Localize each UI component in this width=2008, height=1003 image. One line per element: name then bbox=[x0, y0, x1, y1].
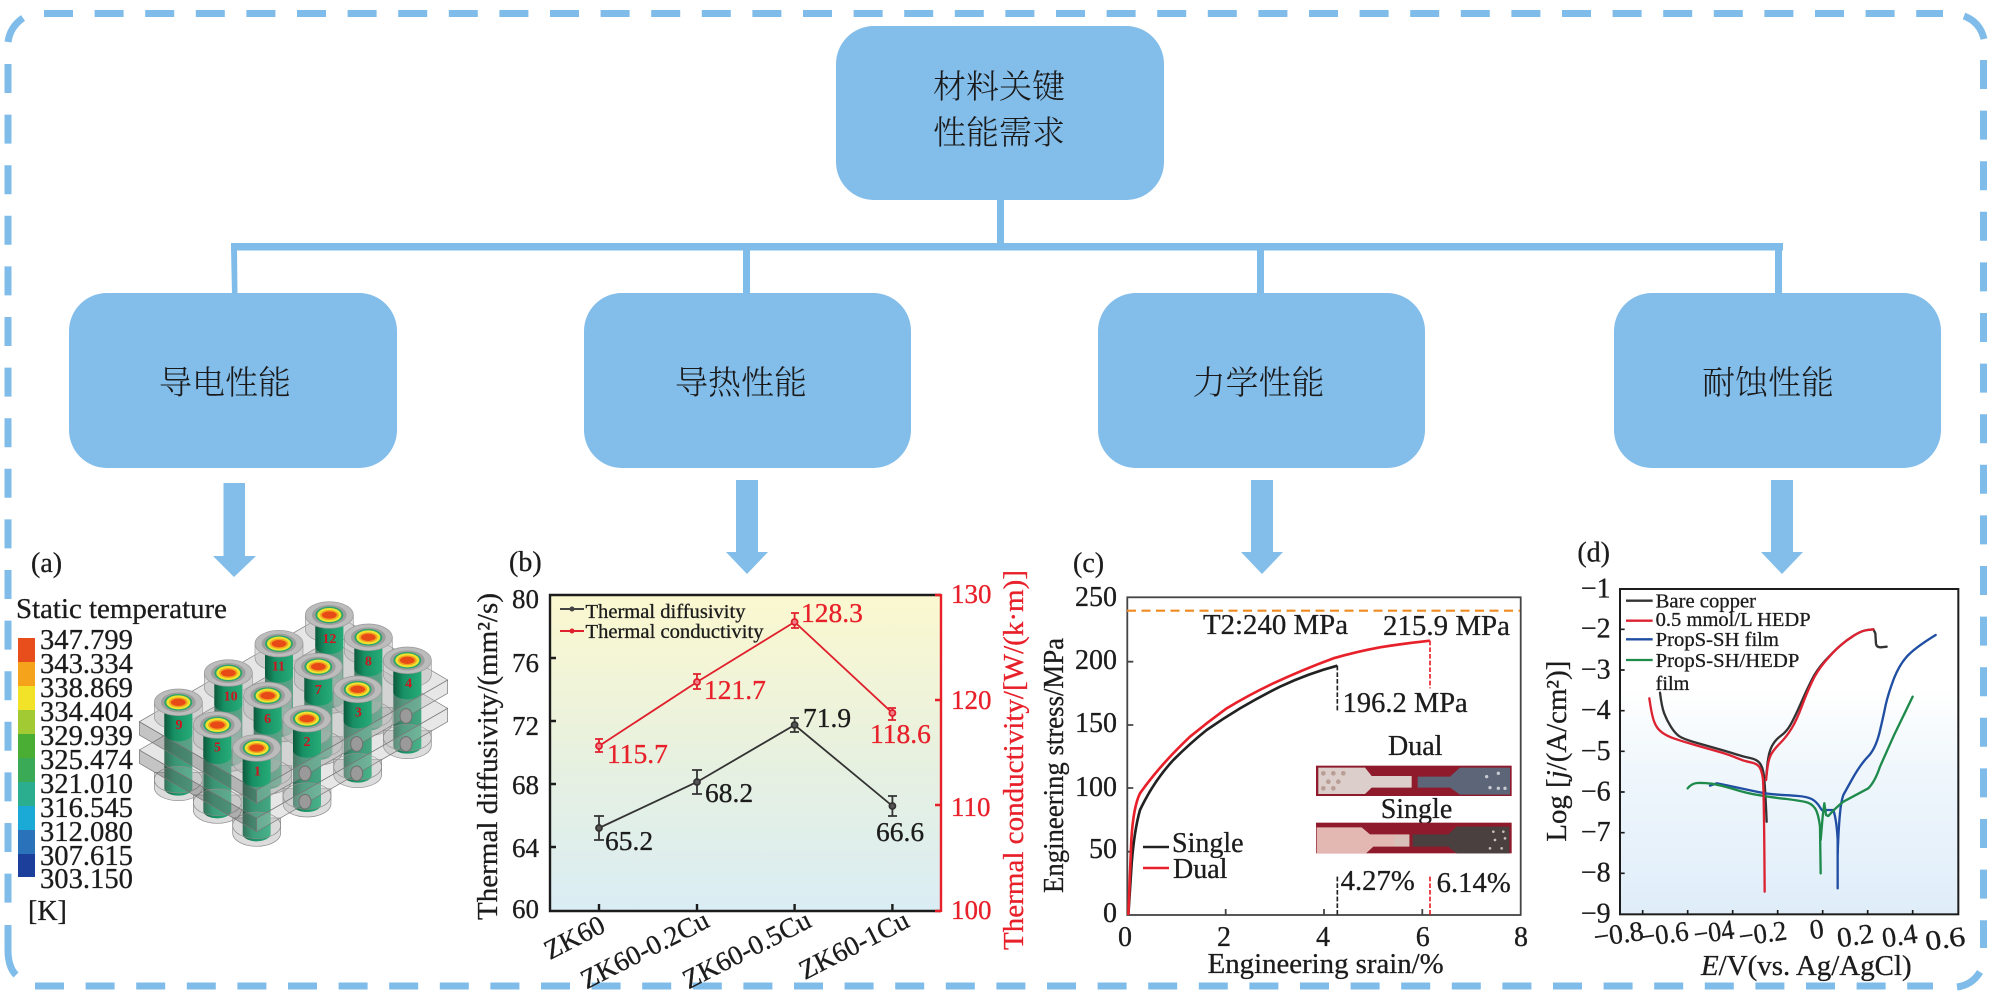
legend: Thermal conductivity bbox=[586, 621, 764, 643]
colorbar values: 347.799 bbox=[40, 625, 133, 656]
y axis labels bbox=[1581, 573, 1611, 929]
legend bbox=[560, 601, 764, 643]
top box: key material property requirements: 性能需求 bbox=[933, 107, 1065, 154]
y axis labels: −7 bbox=[1581, 817, 1611, 848]
3D cylinder array: 6 bbox=[264, 712, 271, 727]
box: mechanical properties bbox=[1098, 293, 1425, 468]
box: thermal conductivity bbox=[584, 293, 911, 468]
x axis labels: −0.2 bbox=[1737, 916, 1789, 953]
x axis labels: 0.2 bbox=[1835, 918, 1876, 954]
3D cylinder array bbox=[139, 602, 448, 846]
annotations: 6.14% bbox=[1437, 868, 1511, 899]
y axis labels: −8 bbox=[1581, 858, 1611, 889]
x axis labels: −04 bbox=[1692, 915, 1736, 951]
y axis labels: −2 bbox=[1581, 613, 1611, 644]
x axis labels: −0.6 bbox=[1638, 916, 1691, 954]
stress-strain curves bbox=[1128, 641, 1430, 915]
polarization curves bbox=[1649, 629, 1936, 892]
value labels: 71.9 bbox=[803, 702, 851, 733]
value labels: 128.3 bbox=[801, 597, 863, 628]
3D cylinder array: 2 bbox=[303, 735, 310, 750]
y axis labels: −4 bbox=[1581, 695, 1611, 726]
x axis labels: 0.4 bbox=[1880, 919, 1919, 954]
right axis title: Thermal conductivity/[W/(k·m)] bbox=[998, 570, 1030, 950]
colorbar values: 329.939 bbox=[40, 721, 133, 752]
3D cylinder array: 9 bbox=[175, 718, 182, 733]
box: thermal conductivity: 导热性能 bbox=[675, 357, 807, 404]
x axis labels: −0.8 bbox=[1592, 916, 1645, 954]
category labels: ZK60 bbox=[538, 909, 610, 965]
axis titles bbox=[1039, 638, 1444, 980]
left axis labels: 80 bbox=[512, 584, 539, 614]
value labels: 118.6 bbox=[870, 718, 931, 749]
right axis labels: 100 bbox=[951, 895, 992, 925]
conductivity series bbox=[595, 613, 896, 752]
box: corrosion resistance bbox=[1614, 293, 1941, 468]
inset photos of tensile specimens bbox=[1316, 766, 1512, 853]
x axis labels: 4 bbox=[1316, 922, 1330, 953]
left axis labels: 60 bbox=[512, 894, 539, 924]
x axis labels bbox=[1118, 922, 1528, 953]
T2 reference dashed line bbox=[1127, 610, 1520, 612]
colorbar values: 325.474 bbox=[40, 745, 133, 776]
y axis labels: −6 bbox=[1581, 777, 1611, 808]
colorbar values: 343.334 bbox=[40, 649, 133, 680]
left axis title: Thermal diffusivity/(mm²/s) bbox=[472, 593, 504, 920]
annotations: T2:240 MPa bbox=[1203, 610, 1349, 641]
y axis labels: −9 bbox=[1581, 898, 1611, 929]
panel label c: (c) bbox=[1073, 548, 1104, 579]
colorbar values: 321.010 bbox=[40, 769, 133, 800]
panel a: static temperature simulation bbox=[16, 548, 448, 927]
legend: PropS-SH/HEDP bbox=[1656, 650, 1799, 672]
legend: film bbox=[1656, 673, 1690, 695]
value labels bbox=[605, 597, 931, 856]
colorbar values: 307.615 bbox=[40, 841, 133, 872]
left axis labels: 68 bbox=[512, 770, 539, 800]
arrow: to panel d bbox=[1761, 480, 1803, 574]
legend bbox=[1143, 828, 1244, 885]
y axis labels: 200 bbox=[1075, 645, 1117, 676]
y axis labels: 50 bbox=[1089, 834, 1117, 865]
x axis labels: 2 bbox=[1217, 922, 1231, 953]
x axis labels: 8 bbox=[1514, 922, 1528, 953]
3D cylinder array: 4 bbox=[405, 677, 412, 692]
legend: Bare copper bbox=[1656, 590, 1756, 612]
colorbar title: Static temperature bbox=[16, 594, 227, 625]
left axis labels: 72 bbox=[512, 711, 539, 741]
plot background and frame bbox=[1620, 589, 1958, 914]
legend: Single bbox=[1172, 828, 1244, 859]
ticks bbox=[1620, 629, 1913, 914]
value labels: 65.2 bbox=[605, 825, 653, 856]
annotations: Single bbox=[1381, 794, 1452, 825]
y axis title: Log [j/(A/cm²)] bbox=[1541, 661, 1573, 842]
diffusivity series bbox=[594, 718, 897, 840]
panel c: stress-strain chart bbox=[1039, 548, 1528, 980]
arrow: to panel a bbox=[213, 483, 256, 577]
y axis labels: −5 bbox=[1581, 736, 1611, 767]
value labels: 68.2 bbox=[705, 777, 753, 808]
unit K: [K] bbox=[28, 896, 67, 927]
y axis labels: −3 bbox=[1581, 654, 1611, 685]
3D cylinder array: 7 bbox=[315, 683, 322, 698]
left axis labels: 76 bbox=[512, 648, 539, 678]
value labels: 115.7 bbox=[607, 738, 668, 769]
y axis labels: 100 bbox=[1075, 772, 1117, 803]
y axis labels: −1 bbox=[1581, 573, 1611, 604]
right axis labels: 110 bbox=[951, 792, 990, 822]
3D cylinder array: 12 bbox=[322, 632, 336, 647]
annotations: 4.27% bbox=[1341, 866, 1415, 897]
colorbar values: 338.869 bbox=[40, 673, 133, 704]
axis titles: E/V(vs. Ag/AgCl) bbox=[1700, 951, 1912, 982]
3D cylinder array: 10 bbox=[224, 690, 238, 705]
value labels: 66.6 bbox=[876, 816, 924, 847]
3D cylinder array: 8 bbox=[365, 654, 372, 669]
category labels bbox=[538, 904, 914, 995]
colorbar values: 334.404 bbox=[40, 697, 133, 728]
x axis labels: 6 bbox=[1416, 922, 1430, 953]
y axis labels bbox=[1075, 582, 1117, 929]
box: electrical conductivity: 导电性能 bbox=[159, 357, 291, 404]
box: mechanical properties: 力学性能 bbox=[1192, 357, 1324, 404]
legend: 0.5 mmol/L HEDP bbox=[1656, 609, 1811, 631]
legend: Dual bbox=[1173, 854, 1228, 885]
plot frame bbox=[1127, 597, 1521, 915]
category labels: ZK60-0.5Cu bbox=[677, 904, 816, 995]
left axis labels bbox=[512, 584, 540, 924]
connector tree bbox=[231, 198, 1783, 294]
colorbar values: 316.545 bbox=[40, 793, 133, 824]
y axis labels: 250 bbox=[1075, 582, 1117, 613]
3D cylinder array: 5 bbox=[214, 741, 221, 756]
right axis labels: 130 bbox=[951, 579, 992, 609]
axes bbox=[550, 594, 941, 912]
arrow: to panel c bbox=[1241, 480, 1283, 574]
annotations: 196.2 MPa bbox=[1343, 688, 1468, 719]
y axis labels: 150 bbox=[1075, 708, 1117, 739]
3D cylinder array: 11 bbox=[272, 660, 285, 675]
3D cylinder array: 1 bbox=[254, 764, 261, 779]
left axis labels: 64 bbox=[512, 833, 540, 863]
top box: key material property requirements bbox=[836, 26, 1164, 200]
x axis labels bbox=[1592, 914, 1967, 958]
plot background bbox=[550, 595, 941, 911]
panel d: polarization curves chart bbox=[1541, 538, 1967, 982]
panel b: thermal diffusivity and conductivity chart bbox=[472, 547, 1030, 995]
arrow: to panel b bbox=[726, 480, 768, 574]
y axis labels: 0 bbox=[1103, 898, 1117, 929]
x axis labels: 0 bbox=[1808, 914, 1826, 946]
box: electrical conductivity bbox=[69, 293, 397, 468]
colorbar values: 303.150 bbox=[40, 864, 133, 895]
legend: Thermal diffusivity bbox=[586, 601, 746, 623]
box: corrosion resistance: 耐蚀性能 bbox=[1702, 357, 1834, 404]
top box: key material property requirements: 材料关键 bbox=[933, 61, 1065, 108]
colorbar values bbox=[40, 625, 133, 895]
category labels: ZK60-1Cu bbox=[793, 904, 914, 985]
right axis labels bbox=[951, 579, 992, 925]
3D cylinder array: 3 bbox=[355, 706, 362, 721]
legend: PropS-SH film bbox=[1656, 629, 1779, 651]
panel label b: (b) bbox=[509, 547, 542, 578]
colorbar bbox=[18, 638, 35, 877]
annotations bbox=[1203, 610, 1511, 899]
axis titles: Engineering srain/% bbox=[1208, 949, 1444, 980]
annotations: 215.9 MPa bbox=[1383, 611, 1511, 642]
category labels: ZK60-0.2Cu bbox=[575, 904, 714, 995]
legend bbox=[1626, 590, 1811, 695]
axis titles: Engineering stress/MPa bbox=[1039, 638, 1070, 893]
colorbar values: 312.080 bbox=[40, 817, 133, 848]
panel label d: (d) bbox=[1577, 538, 1610, 569]
x axis labels: 0.6 bbox=[1923, 921, 1967, 958]
x axis labels: 0 bbox=[1118, 922, 1132, 953]
annotations: Dual bbox=[1388, 731, 1443, 762]
value labels: 121.7 bbox=[704, 674, 766, 705]
right axis labels: 120 bbox=[951, 685, 992, 715]
panel label a: (a) bbox=[31, 548, 62, 579]
